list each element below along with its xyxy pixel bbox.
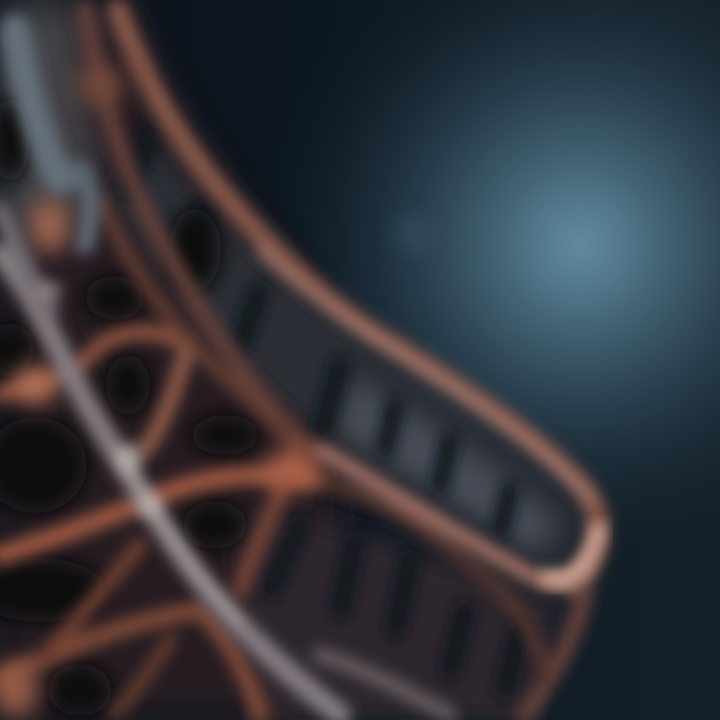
warm highlights [0, 67, 316, 718]
copper strand: lower [320, 450, 590, 582]
dark rungs [130, 130, 520, 690]
copper strand: inner second [85, 10, 310, 450]
white strand: top left [15, 30, 60, 180]
white strand: lower right [320, 655, 450, 715]
copper strand: bottom tail [525, 590, 585, 715]
faint bokeh spot [394, 216, 430, 252]
white strand: main diagonal [0, 255, 340, 715]
corner highlight on strand turn [548, 530, 598, 579]
copper strand: outer highlight [260, 250, 590, 500]
small white glints [38, 280, 162, 515]
warm underlay on left [0, 0, 340, 720]
white strands [0, 30, 450, 715]
copper strand: upper outer [118, 10, 599, 585]
copper strand: horizontals [0, 475, 320, 555]
dark pockets on the left [0, 98, 259, 716]
ribbon interior: grey-blue band between strands [110, 140, 585, 720]
